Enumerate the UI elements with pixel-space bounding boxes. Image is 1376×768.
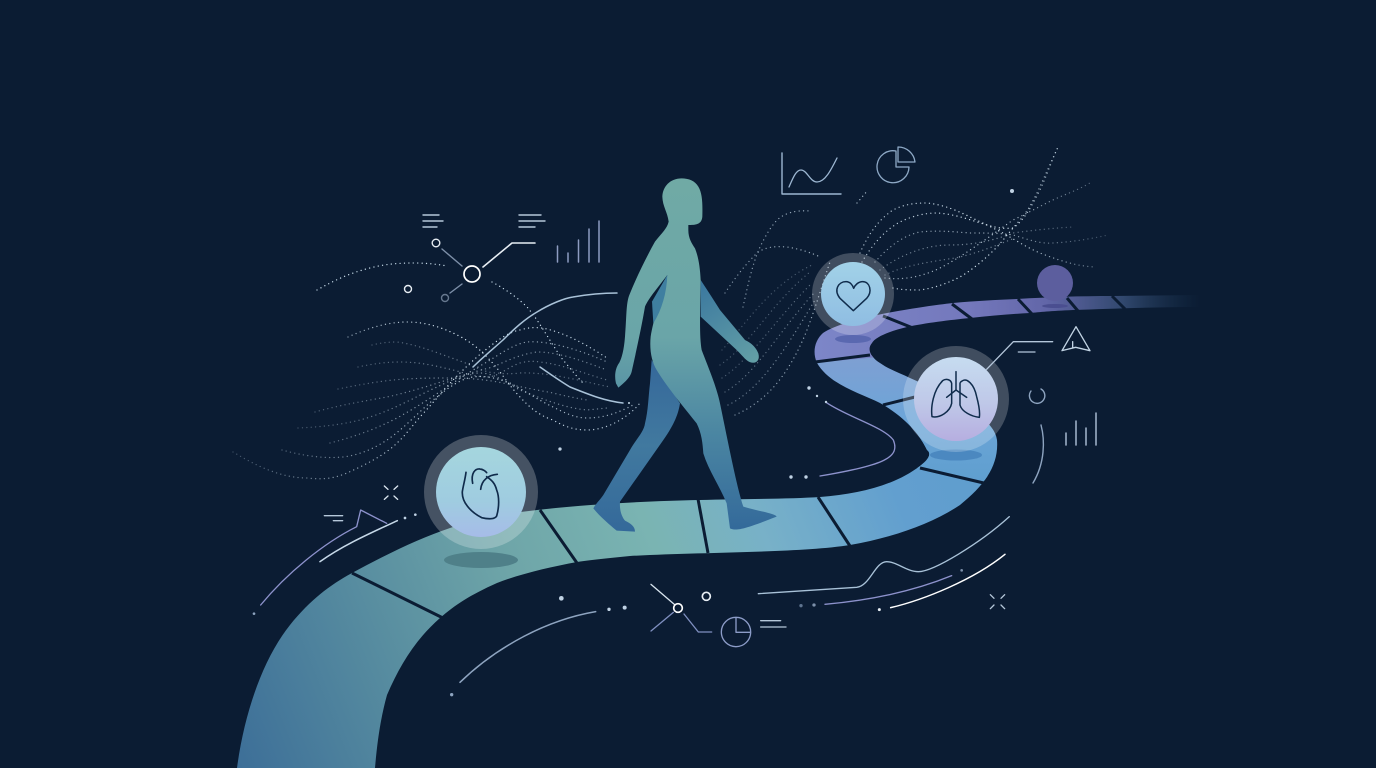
white line — [891, 554, 1005, 608]
disc — [436, 447, 526, 537]
flowing curves near figure — [473, 293, 617, 367]
wave line — [758, 517, 1009, 594]
ball: lungs — [903, 346, 1009, 460]
ring — [424, 435, 538, 549]
flowing curve lower — [540, 367, 623, 403]
shadow — [1042, 304, 1068, 308]
icon: line chart — [782, 153, 841, 194]
path segment: middle bend — [817, 355, 998, 480]
dots — [799, 569, 963, 611]
left lower annotation group — [253, 447, 627, 696]
left dotted wave bundle — [233, 322, 640, 479]
icon: triangle — [1062, 327, 1090, 351]
bottom annotation group — [651, 517, 1009, 647]
icon: heart — [837, 282, 870, 311]
callout from lungs — [987, 342, 1053, 369]
dash lines — [324, 516, 343, 521]
shadow — [835, 335, 871, 343]
dots inside bend — [789, 189, 1014, 479]
icon: sparkle — [990, 595, 1005, 609]
node — [674, 604, 682, 612]
axes — [782, 153, 841, 194]
bar chart right — [1066, 413, 1096, 445]
node diagram lines — [651, 584, 674, 604]
dots near curve — [628, 402, 630, 404]
node lines — [442, 249, 462, 293]
small node — [702, 592, 710, 600]
curve — [320, 521, 397, 562]
disc — [914, 357, 998, 441]
network node diagram — [404, 239, 535, 302]
top dotted arcs left — [317, 263, 583, 383]
main node — [464, 266, 480, 282]
dots — [253, 447, 627, 696]
trend — [789, 158, 837, 187]
ring — [903, 346, 1009, 452]
icon: open ring — [1029, 389, 1045, 403]
disc — [821, 262, 885, 326]
icon: pie chart bottom — [721, 617, 751, 647]
right dotted wave bundle — [720, 147, 1108, 415]
winding path — [200, 280, 1210, 768]
ring — [812, 253, 894, 335]
purple line — [825, 576, 952, 604]
ball: heart — [812, 253, 894, 343]
callout line — [483, 243, 535, 267]
path segment: top road — [814, 296, 1183, 361]
icon: anatomical heart — [462, 469, 499, 519]
body — [615, 178, 777, 530]
long curve beneath road — [460, 612, 596, 682]
arc right — [1033, 425, 1043, 483]
icon: text lines right — [519, 215, 545, 227]
icon: pie chart top — [877, 147, 915, 183]
back leg — [593, 360, 680, 532]
bar chart top left — [558, 221, 599, 262]
path tile dividers — [352, 296, 1125, 618]
sphere — [1037, 265, 1073, 301]
inner arm shadow — [652, 275, 667, 323]
icon: text lines left — [423, 215, 443, 227]
path segment: lower road — [200, 440, 1010, 768]
icon: sparkle — [384, 486, 398, 499]
back arm — [701, 280, 759, 363]
ball: anatomical heart — [424, 435, 538, 568]
s curve inside bend — [820, 402, 895, 476]
arrow curve — [261, 510, 387, 605]
shadow — [444, 552, 518, 568]
icon: lungs — [932, 372, 980, 417]
ball: violet sphere — [1037, 265, 1073, 308]
small nodes — [432, 239, 440, 247]
shadow — [930, 450, 982, 460]
figure: walking person — [593, 178, 777, 532]
dash lines — [761, 621, 786, 627]
